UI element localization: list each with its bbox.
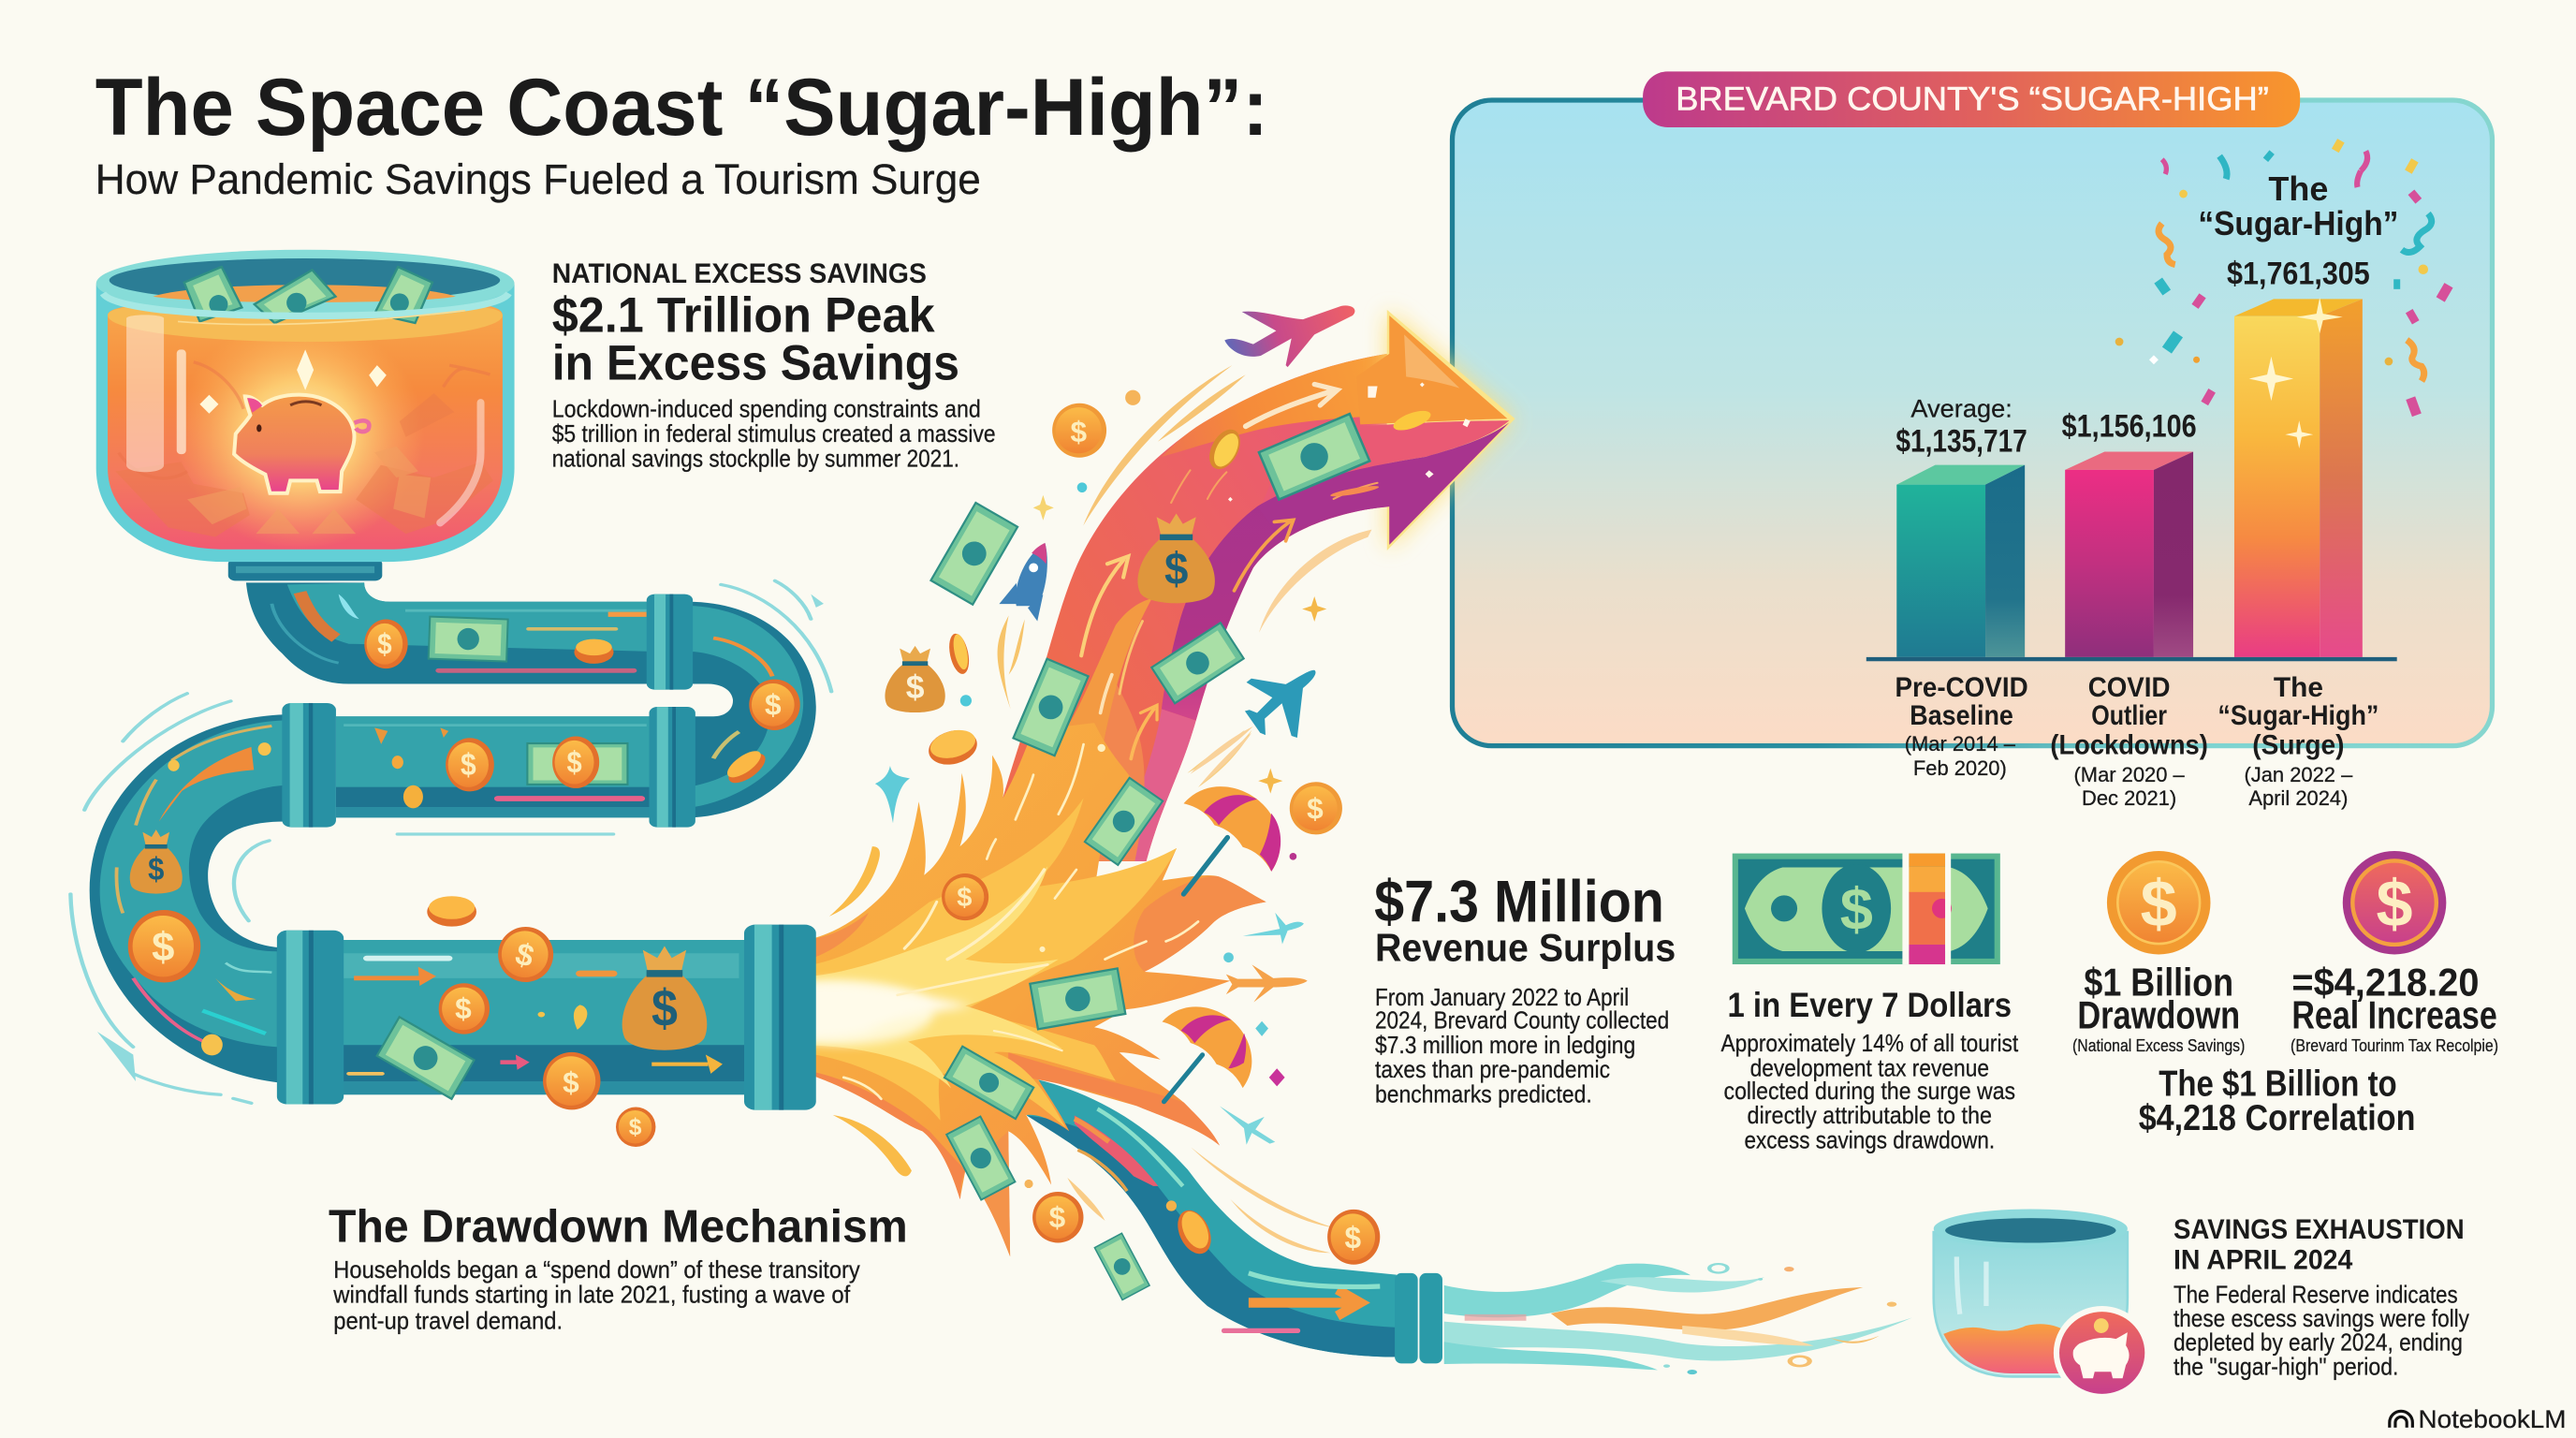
lower teal stream	[1027, 1079, 1397, 1357]
icon: magenta coin: $	[2377, 867, 2413, 941]
text block: national excess savings: $5 trillion in federal stimulus created a massive	[552, 421, 996, 448]
coins: $	[377, 628, 392, 661]
text block: national excess savings: NATIONAL EXCESS SAVINGS	[552, 258, 927, 289]
bar: pre-COVID baseline	[1896, 465, 2025, 657]
coins: $	[461, 746, 476, 782]
text block: revenue surplus: From January 2022 to April	[1375, 985, 1629, 1011]
rim and bills	[96, 250, 515, 325]
chart title pill: BREVARD COUNTY'S “SUGAR-HIGH”	[1676, 81, 2269, 118]
axis label: COVID outlier: COVID	[2088, 672, 2170, 703]
value labels: Average:	[1910, 394, 2012, 423]
text block: savings exhaustion: these escess savings were folly	[2174, 1306, 2469, 1332]
splash lines	[70, 580, 831, 1103]
text block: national excess savings: $2.1 Trillion Peak	[552, 287, 935, 343]
icon: plane magenta	[1224, 305, 1354, 367]
text block: 1 in every 7 dollars: 1 in Every 7 Dollars	[1727, 986, 2012, 1024]
coins: $	[152, 925, 174, 970]
confetti	[2115, 139, 2453, 417]
text block: savings exhaustion	[2174, 1214, 2469, 1381]
axis label: sugar-high: The	[2274, 672, 2323, 703]
axis label: COVID outlier: (Lockdowns)	[2050, 729, 2208, 760]
flame swooshes	[829, 730, 1334, 1253]
elbow and first run	[246, 582, 651, 684]
streaks around ribbon	[960, 365, 1371, 794]
icon: split dollar bill: $	[1840, 877, 1873, 943]
icon: magenta coin	[2343, 851, 2446, 954]
axis label: sugar-high	[2217, 672, 2378, 810]
text block: one billion drawdown	[2072, 960, 2245, 1055]
axis label: COVID outlier: Outlier	[2091, 700, 2167, 731]
text block: real increase: Real Increase	[2291, 992, 2497, 1036]
pipe system	[70, 559, 831, 1110]
coins: $	[1307, 792, 1324, 826]
text block: savings exhaustion: The Federal Reserve indicates	[2174, 1283, 2458, 1308]
value labels: “Sugar-High”	[2198, 204, 2398, 242]
value labels: $1,135,717	[1895, 424, 2027, 460]
bar: sugar-high surge	[2234, 298, 2363, 657]
axis label: pre-COVID: (Mar 2014 –	[1905, 732, 2016, 756]
text block: national excess savings: Lockdown-induced spending constraints and	[552, 397, 981, 423]
text block: correlation: $4,218 Correlation	[2139, 1098, 2415, 1138]
axis label: COVID outlier	[2050, 672, 2208, 810]
money bags: $	[148, 851, 164, 887]
text block: national excess savings: national savings stockplle by summer 2021.	[552, 446, 959, 472]
value labels	[1895, 169, 2398, 460]
axis label: COVID outlier: (Mar 2020 –	[2074, 763, 2186, 786]
text block: one billion drawdown: Drawdown	[2077, 992, 2240, 1036]
draining pipe end with wisps	[1395, 1264, 1912, 1374]
text block: revenue surplus: benchmarks predicted.	[1375, 1081, 1592, 1108]
text block: drawdown mechanism	[329, 1202, 908, 1335]
second run	[336, 716, 651, 817]
text block: drawdown mechanism: windfall funds starting in late 2021, fusting a wave of	[332, 1283, 851, 1308]
flame burst	[747, 723, 1334, 1256]
icon: full savings tank with piggy bank	[96, 250, 515, 562]
icon: umbrella upper	[1140, 765, 1301, 928]
text block: savings exhaustion: the "sugar-high" period.	[2174, 1355, 2398, 1381]
text block: savings exhaustion: SAVINGS EXHAUSTION	[2174, 1214, 2465, 1245]
axis label: sugar-high: (Surge)	[2252, 729, 2345, 760]
icon: piggy coin	[2054, 1306, 2150, 1400]
flanges	[228, 559, 816, 1110]
text block: revenue surplus: Revenue Surplus	[1375, 926, 1676, 970]
text block: 1 in every 7 dollars: excess savings drawdown.	[1744, 1128, 1995, 1154]
money bags: $	[651, 980, 678, 1038]
coins: $	[957, 883, 972, 913]
text block: revenue surplus: $7.3 million more in ledging	[1375, 1033, 1635, 1059]
text block: 1 in every 7 dollars: Approximately 14% of all tourist	[1720, 1031, 2018, 1057]
axis label: sugar-high: April 2024)	[2248, 786, 2348, 810]
text block: one billion drawdown: $1 Billion	[2084, 960, 2233, 1004]
text block: revenue surplus	[1374, 869, 1676, 1108]
coins: $	[455, 991, 472, 1025]
chart baseline	[1866, 657, 2397, 661]
money bags: $	[1164, 544, 1188, 594]
axis label: pre-COVID	[1895, 672, 2028, 780]
axis label: pre-COVID: Pre-COVID	[1895, 672, 2028, 703]
coins: $	[1345, 1221, 1361, 1255]
text block: revenue surplus: taxes than pre-pandemic	[1375, 1057, 1610, 1083]
subtitle: How Pandemic Savings Fueled a Tourism Surge	[95, 155, 981, 203]
right bend	[688, 602, 816, 817]
bills	[377, 414, 1369, 1299]
rising ribbon arrow	[986, 310, 1515, 861]
text block: correlation	[2139, 1064, 2415, 1138]
icon: plane teal	[1245, 670, 1315, 738]
wisps	[1444, 1264, 1912, 1374]
text block: drawdown mechanism: pent-up travel demand.	[333, 1309, 563, 1335]
ribbon arrows and sparks	[1062, 384, 1378, 820]
left bend	[90, 714, 285, 1083]
icons around flame burst	[875, 765, 1308, 1188]
icon: rocket	[998, 543, 1047, 709]
arrowhead	[1257, 310, 1515, 550]
text block: real increase: =$4,218.20	[2291, 960, 2479, 1004]
value labels: $1,156,106	[2062, 409, 2197, 445]
text block: 1 in every 7 dollars: collected during the surge was	[1724, 1078, 2015, 1105]
text block: real increase	[2291, 960, 2498, 1055]
coins: $	[765, 687, 782, 721]
coins: $	[566, 745, 582, 779]
text block: real increase: (Brevard Tourinm Tax Recolpie)	[2291, 1035, 2498, 1055]
axis label: COVID outlier: Dec 2021)	[2082, 786, 2176, 810]
text block: national excess savings: in Excess Savings	[552, 335, 959, 390]
text block: one billion drawdown: (National Excess Savings)	[2072, 1035, 2245, 1055]
end flange	[1395, 1273, 1442, 1363]
text block: 1 in every 7 dollars: development tax revenue	[1750, 1055, 1989, 1081]
money bags: $	[906, 668, 925, 706]
coins: $	[1070, 415, 1087, 448]
text block: drawdown mechanism: The Drawdown Mechanism	[329, 1202, 908, 1253]
bar: COVID outlier	[2065, 452, 2193, 657]
icon: empty savings cup	[1934, 1209, 2150, 1400]
text block: drawdown mechanism: Households began a “spend down” of these transitory	[333, 1257, 860, 1284]
coins: $	[1049, 1200, 1066, 1234]
axis label: pre-COVID: Feb 2020)	[1913, 756, 2007, 780]
axis label: sugar-high: (Jan 2022 –	[2244, 763, 2353, 786]
watermark: NotebookLM: NotebookLM	[2419, 1404, 2566, 1433]
icon: split dollar bill	[1733, 853, 2000, 964]
flame highlights	[843, 744, 1198, 1099]
text block: national excess savings	[552, 258, 996, 472]
icon: gold coin	[2107, 851, 2210, 954]
icon: gold coin: $	[2141, 867, 2177, 941]
coins: $	[563, 1065, 579, 1099]
money bags	[130, 514, 1215, 1050]
chart title pill	[1643, 71, 2300, 127]
coins: $	[512, 936, 537, 975]
icon: glowing piggy	[199, 349, 387, 493]
value labels: The	[2268, 169, 2328, 208]
text block: 1 in every 7 dollars	[1720, 986, 2018, 1154]
panel: bar chart	[1453, 71, 2492, 810]
text block: savings exhaustion: depleted by early 2024, ending	[2174, 1329, 2463, 1356]
text block: 1 in every 7 dollars: directly attributable to the	[1748, 1103, 1992, 1129]
large pipe run	[339, 940, 749, 1094]
text block: correlation: The $1 Billion to	[2159, 1064, 2397, 1104]
floating decorations	[128, 305, 1433, 1299]
title: The Space Coast “Sugar-High”:	[95, 63, 1268, 153]
coins	[128, 404, 1433, 1265]
value labels: $1,761,305	[2227, 257, 2370, 292]
coins: $	[629, 1115, 642, 1140]
text block: savings exhaustion: IN APRIL 2024	[2174, 1245, 2353, 1276]
axis label: sugar-high: “Sugar-High”	[2217, 700, 2378, 731]
icon: umbrella lower	[1123, 987, 1271, 1135]
axis label: pre-COVID: Baseline	[1910, 700, 2013, 731]
text block: revenue surplus: 2024, Brevard County collected	[1375, 1007, 1669, 1034]
text block: revenue surplus: $7.3 Million	[1374, 869, 1664, 934]
